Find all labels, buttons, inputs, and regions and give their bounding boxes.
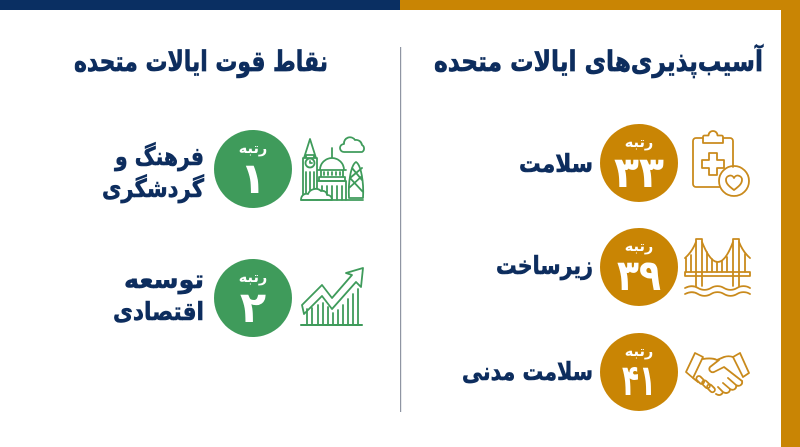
label: culture and tourism: فرهنگ و <box>113 142 204 172</box>
label: culture and tourism: گردشگری <box>102 174 204 204</box>
rank badge 1: ۱ <box>240 154 266 204</box>
row: health rank 33 <box>519 124 749 202</box>
icon: handshake <box>686 353 749 395</box>
rank badge 41: ۴۱ <box>622 356 656 406</box>
label: civil health: سلامت مدنی <box>462 357 593 386</box>
rank badge 2: رتبه <box>239 270 267 286</box>
label: health: سلامت <box>519 149 593 178</box>
rank badge 33 <box>600 124 678 202</box>
rank badge 1: رتبه <box>239 141 267 157</box>
rank badge 39: رتبه <box>625 239 653 255</box>
rank badge 41: رتبه <box>625 344 653 360</box>
heading: strengths: نقاط قوت ایالات متحده <box>74 45 328 78</box>
label: economic development: اقتصادی <box>113 297 204 326</box>
label: economic development: توسعه <box>124 265 204 295</box>
rank badge 39 <box>600 228 678 306</box>
rank badge 1 <box>214 130 292 208</box>
rank badge 2 <box>214 259 292 337</box>
rank badge 33: رتبه <box>625 135 653 151</box>
label: economic development <box>113 265 204 326</box>
rank badge 33: ۳۳ <box>614 148 664 198</box>
rank badge 41 <box>600 333 678 411</box>
row: civil health rank 41 <box>462 333 749 411</box>
label: infrastructure: زیرساخت <box>496 251 593 281</box>
row: culture and tourism rank 1 <box>102 130 364 208</box>
label: culture and tourism <box>102 142 204 204</box>
icon: growth chart <box>301 268 363 325</box>
icon: bridge <box>685 239 750 296</box>
row: infrastructure rank 39 <box>496 228 750 306</box>
rank badge 2: ۲ <box>240 283 266 333</box>
rank badge 39: ۳۹ <box>617 251 661 301</box>
icon: clipboard with heart <box>693 131 749 196</box>
icon: city skyline <box>301 137 364 200</box>
row: economic development rank 2 <box>113 259 363 337</box>
